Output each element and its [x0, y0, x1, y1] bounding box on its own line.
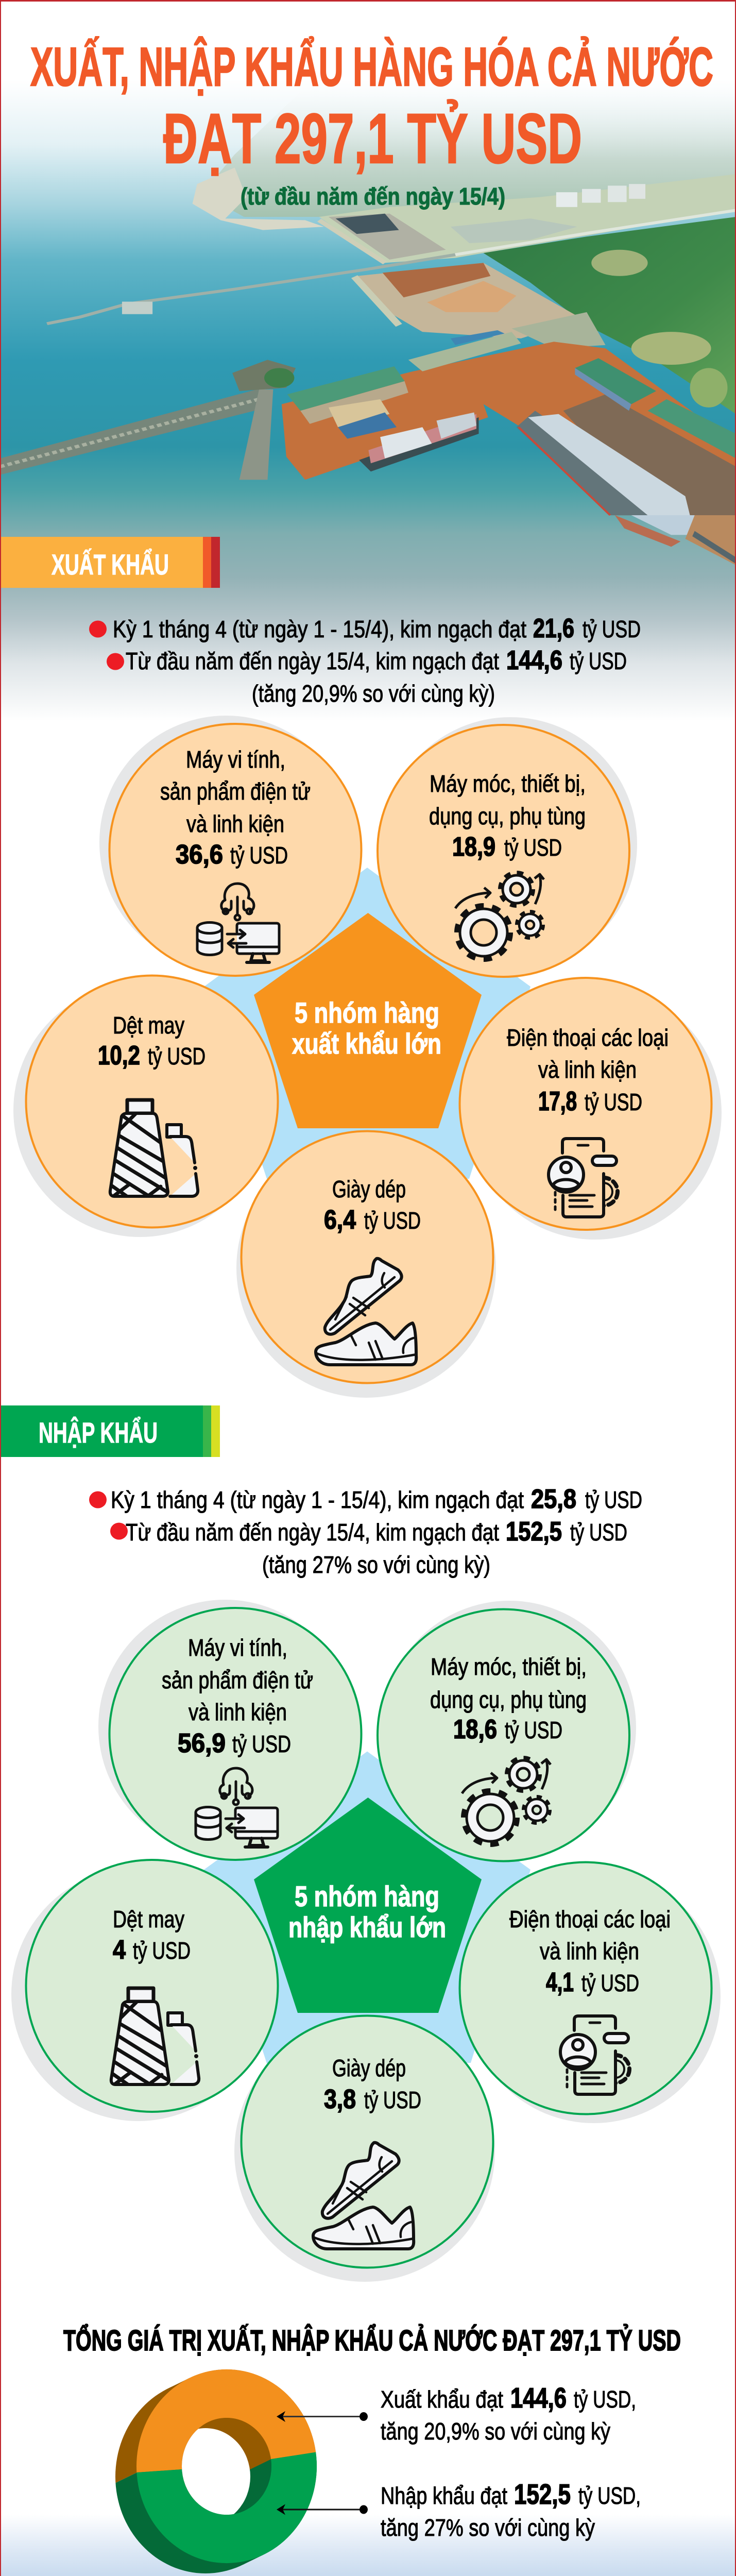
circle: textiles: 4 [113, 1935, 126, 1965]
section banner: nhập khẩu [1, 1405, 220, 1457]
circle: computers [109, 724, 362, 976]
center pentagon: export: xuất khẩu lớn [292, 1027, 441, 1060]
circle: machinery: dụng cụ, phụ tùng [429, 803, 586, 829]
circle: phones: Điện thoại các loại [509, 1906, 671, 1933]
circle: computers: tỷ USD [232, 1731, 291, 1757]
circle: machinery: tỷ USD [504, 834, 562, 861]
circle: machinery: Máy móc, thiết bị, [431, 1653, 587, 1680]
export group diagram [13, 716, 722, 1398]
center pentagon: import: 5 nhóm hàng [295, 1880, 439, 1912]
circle: phones: tỷ USD [585, 1089, 642, 1115]
arrow: export [277, 2411, 368, 2422]
circle: machinery: 18,6 [453, 1715, 497, 1744]
section banner: nhập khẩu: NHẬP KHẨU [39, 1416, 158, 1449]
circle: phones: 17,8 [538, 1087, 577, 1116]
center pentagon: export [254, 913, 482, 1128]
circle: footwear: 3,8 [324, 2084, 356, 2114]
circle: machinery: 18,9 [452, 832, 495, 862]
circle: phones: Điện thoại các loại [507, 1024, 669, 1051]
circle: machinery: Máy móc, thiết bị, [430, 770, 586, 797]
circle: footwear: Giày dép [332, 2055, 406, 2081]
center pentagon: export: 5 nhóm hàng [295, 996, 439, 1029]
light blue pentagon [204, 1752, 530, 2063]
import summary text: 25,8 [531, 1484, 576, 1514]
circle: footwear [241, 2015, 493, 2268]
circle: textiles: Dệt may [113, 1012, 184, 1039]
circle: textiles [26, 976, 278, 1227]
circle: computers: 36,6 [176, 840, 223, 870]
export summary text: 21,6 [533, 614, 574, 643]
circle: footwear [241, 1131, 493, 1383]
circle: machinery [378, 725, 629, 977]
hero photo: aerial view of port [0, 0, 736, 721]
circle: machinery: dụng cụ, phụ tùng [430, 1686, 587, 1713]
circle: textiles: Dệt may [113, 1906, 184, 1933]
donut legend: export: 144,6 [510, 2382, 567, 2414]
circle: machinery [378, 1609, 629, 1861]
export summary text: 144,6 [506, 646, 562, 675]
circle: computers: Máy vi tính, [188, 1634, 287, 1661]
title: (từ đầu năm đến ngày 15/4) [241, 183, 505, 210]
export summary text: tỷ USD [570, 648, 627, 674]
circle: phones: tỷ USD [581, 1970, 639, 1996]
circle: phones [459, 1862, 712, 2114]
circle: machinery: tỷ USD [505, 1717, 562, 1743]
circle: footwear: 6,4 [324, 1205, 356, 1235]
circle: footwear: tỷ USD [364, 1207, 421, 1234]
donut legend: import [381, 2478, 641, 2541]
circle: footwear: tỷ USD [364, 2087, 421, 2113]
circle: textiles: 10,2 [98, 1041, 140, 1071]
circle: computers: Máy vi tính, [186, 746, 285, 773]
import summary text: 152,5 [506, 1517, 562, 1547]
import circle shadows [11, 1600, 721, 2282]
center pentagon: import [254, 1798, 482, 2013]
import summary text: tỷ USD [570, 1519, 627, 1546]
donut legend: import: tăng 27% so với cùng kỳ [381, 2514, 595, 2541]
export summary text [89, 614, 641, 707]
section banner: xuất khẩu [1, 537, 220, 588]
circle: phones [459, 978, 712, 1230]
donut legend: export: tăng 20,9% so với cùng kỳ [381, 2418, 610, 2445]
circle: phones: và linh kiện [538, 1056, 637, 1083]
donut legend: export: Xuất khẩu đạt [381, 2386, 503, 2413]
3D donut chart [115, 2369, 317, 2573]
circle: textiles: tỷ USD [133, 1937, 191, 1964]
import summary text: tỷ USD [585, 1486, 642, 1513]
import summary text: Kỳ 1 tháng 4 (từ ngày 1 - 15/4), kim ngạch đạt [111, 1486, 524, 1513]
bottom photo: container port with cranes [0, 2514, 736, 2576]
import summary text: (tăng 27% so với cùng kỳ) [262, 1551, 490, 1578]
circle: computers: và linh kiện [186, 810, 284, 837]
circle shadows [13, 716, 722, 1398]
arrow: import [277, 2504, 368, 2515]
center pentagon: import: nhập khẩu lớn [288, 1911, 446, 1943]
circle: footwear: Giày dép [332, 1176, 406, 1202]
circle: textiles: tỷ USD [148, 1043, 206, 1070]
light blue pentagon [204, 868, 530, 1179]
title [30, 36, 713, 210]
import summary text [89, 1484, 642, 1578]
donut legend: import: 152,5 [514, 2478, 571, 2510]
export summary text: tỷ USD [583, 616, 641, 642]
hero lower tail: ship stern and dock [615, 515, 736, 565]
circle: phones: 4,1 [546, 1968, 574, 1997]
circle: textiles [26, 1860, 278, 2112]
export summary text: Kỳ 1 tháng 4 (từ ngày 1 - 15/4), kim ngạch đạt [113, 616, 526, 642]
donut legend: import: Nhập khẩu đạt [381, 2482, 507, 2509]
circle: computers: sản phẩm điện tử [160, 778, 311, 805]
circle: computers: 56,9 [178, 1728, 226, 1758]
circle: computers: tỷ USD [230, 842, 288, 869]
export summary text: (tăng 20,9% so với cùng kỳ) [252, 680, 495, 707]
import group diagram [11, 1600, 721, 2282]
export summary text: Từ đầu năm đến ngày 15/4, kim ngạch đạt [126, 648, 499, 674]
circle: computers: sản phẩm điện tử [162, 1667, 313, 1693]
circle: computers [109, 1608, 362, 1860]
circle: phones: và linh kiện [540, 1938, 639, 1964]
donut legend: export: tỷ USD, [574, 2386, 636, 2413]
import summary text: Từ đầu năm đến ngày 15/4, kim ngạch đạt [126, 1519, 499, 1546]
circle: computers: và linh kiện [189, 1699, 287, 1725]
donut legend: export [381, 2382, 636, 2445]
donut legend: import: tỷ USD, [578, 2482, 641, 2509]
section banner: xuất khẩu: XUẤT KHẨU [52, 548, 169, 581]
